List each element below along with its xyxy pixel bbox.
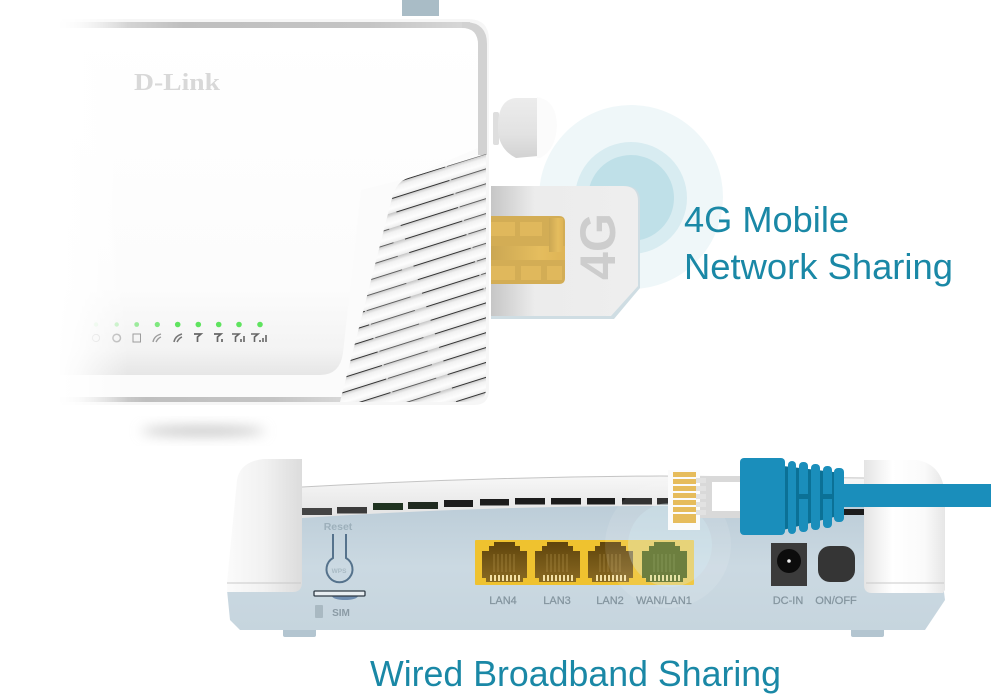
network cable: [842, 484, 991, 507]
heading: 4G mobile network sharing: Network Sharing: [684, 246, 953, 287]
SIM chip: [491, 216, 565, 284]
SIM body: [491, 186, 640, 319]
DC-in jack: [771, 543, 807, 586]
ethernet plug: [668, 458, 991, 535]
cable strain relief: [783, 461, 844, 534]
port labels: [489, 595, 857, 607]
heading: 4G mobile network sharing: 4G Mobile: [684, 199, 849, 240]
port LAN4: [482, 542, 527, 582]
on/off button: [818, 546, 855, 582]
SIM slot: SIM: [332, 608, 350, 619]
antenna stub: [402, 0, 439, 16]
left fade: [58, 16, 128, 410]
status LEDs: [94, 322, 263, 327]
heading: 4G mobile network sharing: [684, 199, 953, 287]
rear router: [227, 458, 991, 637]
LAN ports: [475, 540, 694, 585]
vent grille: [340, 154, 486, 402]
top face: [60, 26, 484, 401]
reset and WPS button: Reset: [324, 521, 353, 533]
right edge band: [462, 22, 487, 155]
rear lid: [302, 476, 865, 518]
port labels: ON/OFF: [815, 595, 857, 607]
status icons: [92, 334, 266, 342]
plug housing: [668, 470, 700, 530]
port labels: LAN3: [543, 595, 571, 607]
rear body: [227, 504, 945, 630]
reset and WPS button: [324, 521, 353, 582]
port labels: LAN4: [489, 595, 517, 607]
heading: wired broadband sharing: Wired Broadband Sharing: [370, 653, 781, 694]
port LAN3: [535, 542, 580, 582]
port WAN/LAN1: [642, 542, 687, 582]
SIM slot: [314, 591, 365, 619]
top panel: [60, 28, 478, 375]
port labels: DC-IN: [773, 595, 803, 607]
logo: D-Link: [134, 70, 221, 96]
reset and WPS button: WPS: [332, 568, 347, 575]
port labels: WAN/LAN1: [636, 595, 692, 607]
top edge band: [60, 22, 470, 28]
vents: [302, 498, 864, 515]
SIM 4G label: 4G: [570, 213, 626, 280]
router shadow: [141, 426, 265, 436]
gold contacts: [673, 472, 696, 523]
right pillar: [864, 460, 945, 593]
antenna knob: [493, 97, 557, 158]
port labels: LAN2: [596, 595, 624, 607]
SIM card: [491, 186, 640, 319]
front router body: [58, 16, 489, 410]
bottom edge band: [60, 397, 345, 402]
outer shell: [60, 19, 489, 405]
connector boot: [740, 458, 785, 535]
port LAN2: [588, 542, 633, 582]
feet: [283, 628, 884, 637]
contact grooves: [696, 478, 706, 515]
signal circles behind SIM: [539, 105, 723, 289]
highlight circles on WAN port: [605, 482, 731, 608]
left pillar: [227, 459, 302, 592]
